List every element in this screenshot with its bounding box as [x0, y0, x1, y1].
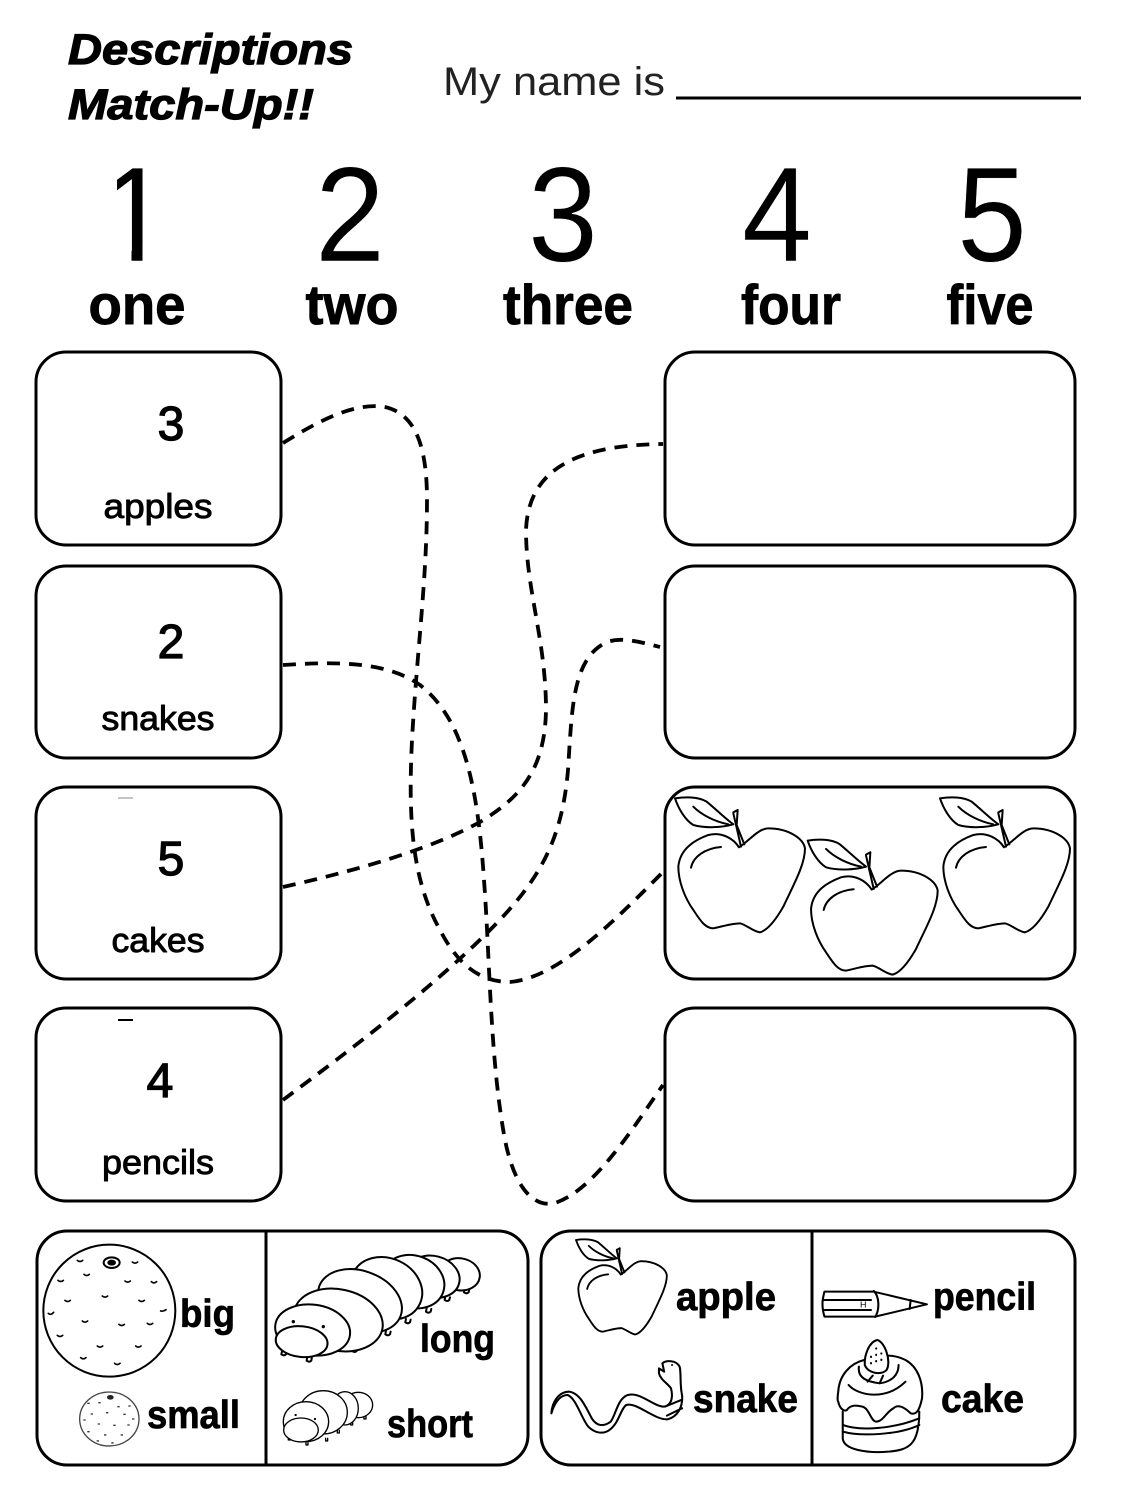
title — [68, 26, 353, 129]
descriptor words — [147, 1293, 495, 1446]
number headings: 5 — [957, 139, 1027, 290]
icon: big orange — [43, 1245, 175, 1377]
panel: left cards: 5 — [158, 833, 184, 886]
panel: left cards: 4 — [147, 1055, 173, 1108]
icon: middle apple — [808, 840, 938, 975]
icon: left apple — [675, 797, 805, 932]
icon: small orange — [80, 1392, 139, 1446]
panel: left cards — [36, 352, 281, 1201]
descriptor words: short — [387, 1403, 473, 1446]
descriptor words: small — [147, 1394, 240, 1437]
icon: snake — [551, 1361, 682, 1433]
number headings: 3 — [528, 139, 598, 290]
panel: right cards — [665, 352, 1075, 1201]
number headings: 1 — [100, 139, 170, 290]
number headings: 2 — [315, 139, 385, 290]
number words: three — [503, 273, 633, 336]
icon: cake — [838, 1340, 922, 1452]
number words: five — [946, 273, 1034, 336]
number words: four — [741, 273, 841, 336]
number words: one — [88, 273, 186, 336]
panel: left cards: 3 — [158, 398, 184, 451]
panel: left cards: snakes — [102, 700, 214, 738]
icon: apple — [576, 1239, 667, 1334]
dashed matching lines — [283, 406, 663, 1204]
icon: pencil — [822, 1291, 927, 1317]
number words — [88, 273, 1034, 336]
panel: nouns box — [541, 1231, 1075, 1465]
noun words: cake — [941, 1378, 1024, 1421]
title: Match-Up!! — [68, 81, 314, 129]
panel: left cards: cakes — [112, 922, 204, 960]
number headings: 4 — [742, 139, 812, 290]
number words: two — [306, 273, 398, 336]
panel: left cards: 2 — [158, 616, 184, 669]
noun words: apple — [676, 1276, 776, 1319]
noun words: snake — [693, 1378, 798, 1421]
descriptor words: big — [180, 1293, 235, 1336]
descriptor words: long — [420, 1318, 495, 1361]
panel: descriptions box — [37, 1231, 528, 1465]
panel: left cards: apples — [104, 488, 212, 526]
name line: My name is — [443, 60, 665, 104]
panel: left cards: pencils — [102, 1144, 214, 1182]
number headings — [95, 139, 1027, 290]
title: Descriptions — [68, 26, 353, 74]
noun words — [676, 1276, 1036, 1421]
icon: short caterpillar — [283, 1391, 373, 1445]
icon: long caterpillar — [272, 1246, 482, 1362]
icon: pencil: H — [860, 1300, 866, 1310]
icon: three apples — [675, 797, 1070, 975]
icon: right apple — [940, 797, 1070, 932]
noun words: pencil — [933, 1276, 1036, 1319]
